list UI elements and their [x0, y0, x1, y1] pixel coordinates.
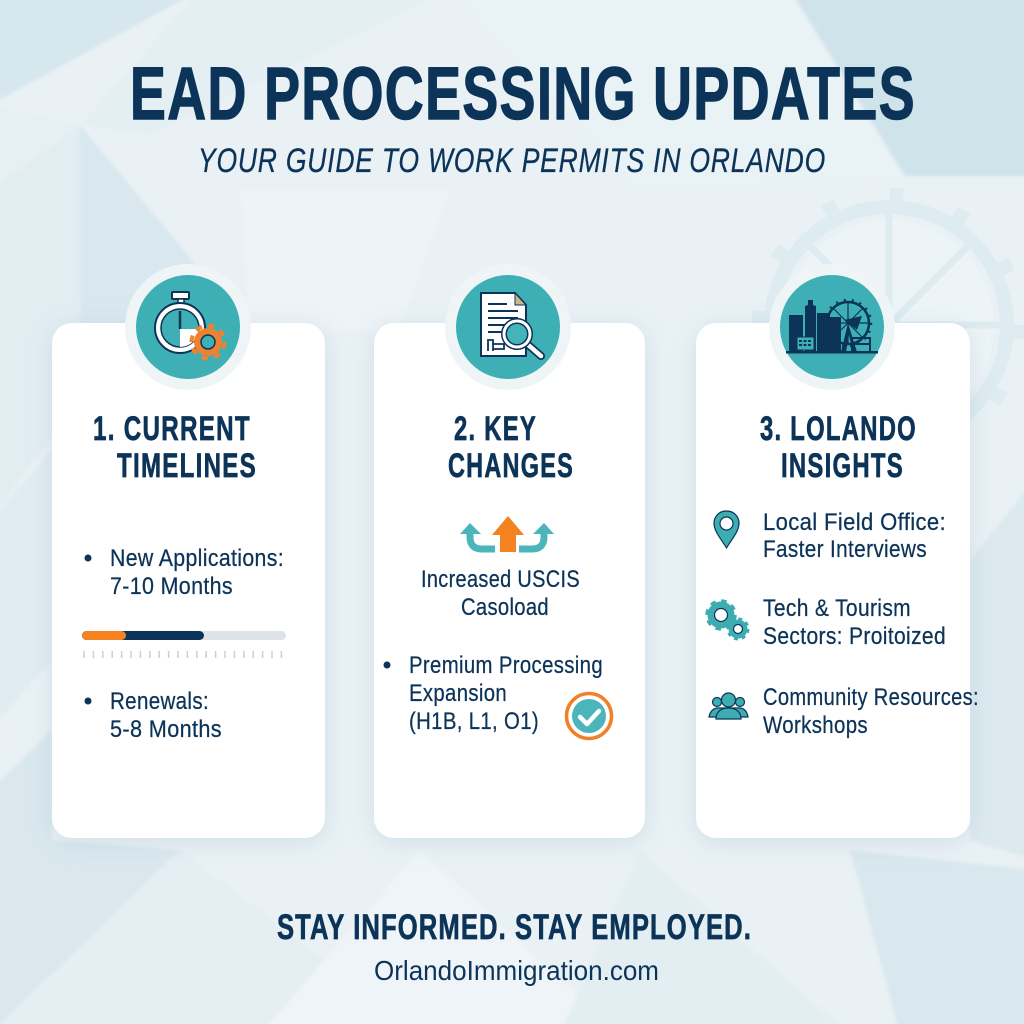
- icon: document and magnifier: [445, 264, 571, 390]
- text: caseload: Casoload: [461, 594, 549, 621]
- bullet: new applications: [84, 545, 284, 600]
- bullet: renewals: 5-8 Months: [110, 716, 222, 743]
- heading: [760, 410, 917, 485]
- heading: CHANGES: [448, 447, 574, 485]
- heading: 1. CURRENT: [93, 410, 251, 448]
- panel: key changes: [374, 264, 645, 838]
- icon: stopwatch and gear: [125, 264, 251, 390]
- bullet: premium processing: [384, 652, 603, 735]
- bullet: renewals: Renewals:: [110, 688, 209, 715]
- item: tech and tourism: Sectors: Proitoized: [763, 623, 946, 650]
- item: community resources: [709, 684, 979, 739]
- bullet: premium processing: Expansion: [409, 680, 507, 707]
- heading: [448, 410, 574, 485]
- text: caseload: Increased USCIS: [421, 566, 580, 593]
- item: tech and tourism: [707, 595, 946, 650]
- panel: current timelines: [52, 264, 325, 838]
- item: field office: [714, 509, 946, 563]
- item: field office: Local Field Office:: [763, 509, 946, 536]
- icon: three arrows: [460, 516, 554, 552]
- item: community resources: Workshops: [763, 712, 868, 739]
- subtitle: YOUR GUIDE TO WORK PERMITS IN ORLANDO: [198, 142, 826, 180]
- icon: check badge: [566, 694, 612, 738]
- panel: orlando insights: [696, 264, 979, 838]
- heading: [93, 410, 257, 485]
- heading: 3. LOLANDO: [760, 410, 917, 448]
- background ferris wheel watermark: [759, 195, 1019, 455]
- item: community resources: Community Resources:: [763, 684, 979, 711]
- text: caseload: [421, 566, 580, 621]
- item: field office: Faster Interviews: [763, 536, 927, 563]
- bullet: premium processing: (H1B, L1, O1): [409, 708, 539, 735]
- bullet: renewals: [84, 688, 222, 743]
- icon: orlando skyline: [769, 264, 895, 390]
- bullet: premium processing: Premium Processing: [409, 652, 603, 679]
- icon: gears: [707, 601, 748, 639]
- bullet: new applications: 7-10 Months: [110, 573, 233, 600]
- heading: TIMELINES: [117, 447, 257, 485]
- item: tech and tourism: Tech & Tourism: [763, 595, 911, 622]
- icon: people: [709, 693, 748, 719]
- footer website: OrlandoImmigration.com: [374, 955, 659, 986]
- progress bar: [82, 631, 286, 658]
- heading: INSIGHTS: [781, 447, 904, 485]
- heading: 2. KEY: [454, 410, 537, 448]
- footer tagline: STAY INFORMED. STAY EMPLOYED.: [277, 908, 752, 947]
- bullet: new applications: New Applications:: [110, 545, 284, 572]
- icon: map pin: [714, 511, 739, 548]
